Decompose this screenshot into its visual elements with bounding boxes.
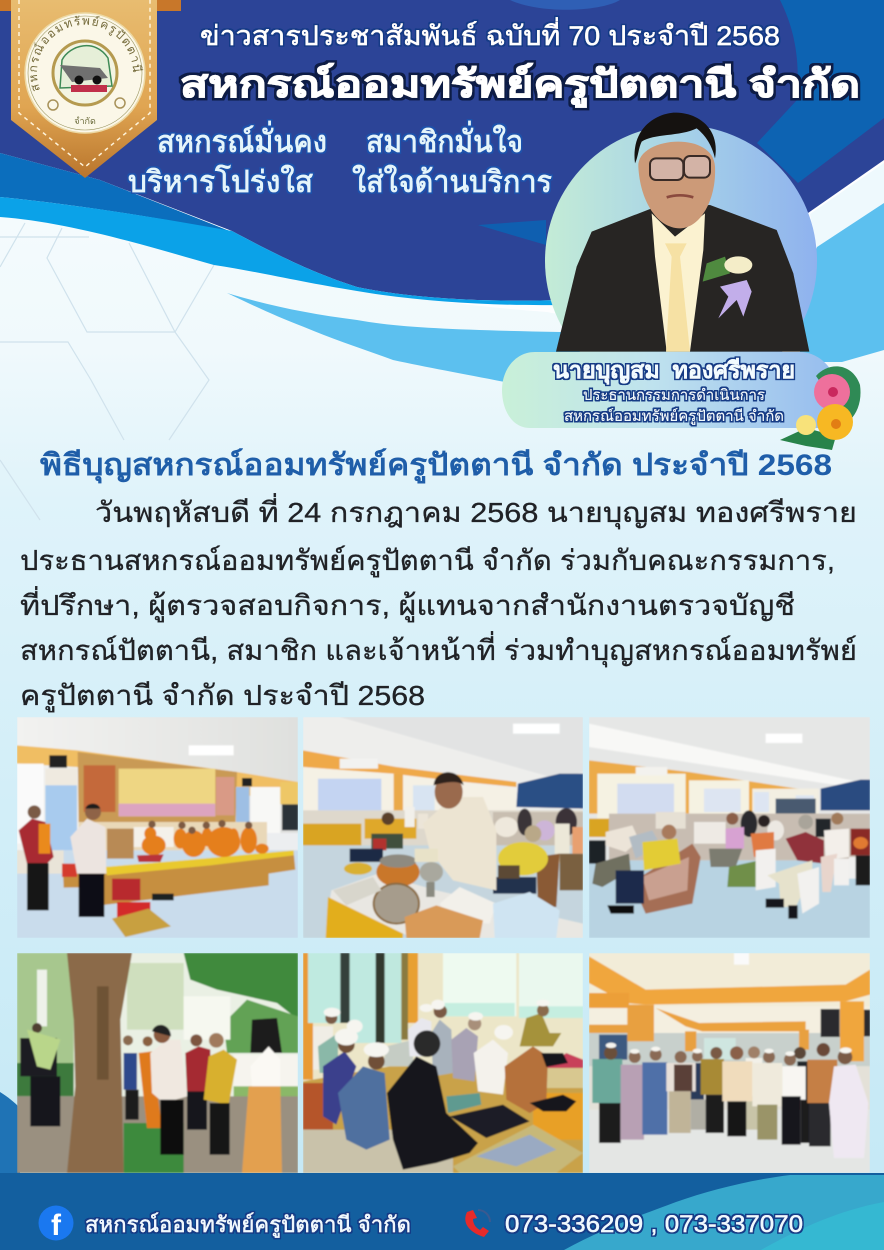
- event body text: ครูปัตตานี จำกัด ประจำปี 2568: [20, 680, 425, 713]
- corsage: [703, 256, 752, 318]
- photo: group portrait: [589, 953, 870, 1173]
- photo: planting by tree: [17, 953, 298, 1173]
- portrait: [545, 113, 817, 397]
- issue line: ข่าวสารประชาสัมพันธ์ ฉบับที่ 70 ประจำปี 2568: [200, 17, 780, 51]
- logo seal: จำกัด: [74, 116, 96, 126]
- tie: [665, 243, 690, 352]
- jacket: [556, 205, 809, 352]
- icon: tropical flowers: [780, 366, 861, 450]
- logo ribbon: [0, 0, 181, 178]
- photo: seated audience: [589, 717, 870, 938]
- footer band: [0, 1173, 884, 1250]
- logo seal: สหกรณ์ออมทรัพย์ครูปัตตานี: [30, 15, 144, 92]
- event body text: [20, 493, 857, 713]
- glasses: [650, 156, 710, 180]
- event body text: สหกรณ์ปัตตานี, สมาชิก และเจ้าหน้าที่ ร่วมทำบุญสหกรณ์ออมทรัพย์: [20, 631, 857, 668]
- event body text: ที่ปรึกษา, ผู้ตรวจสอบกิจการ, ผู้แทนจากสำนักงานตรวจบัญชี: [20, 586, 795, 623]
- event body text: ประธานสหกรณ์ออมทรัพย์ครูปัตตานี จำกัด ร่วมกับคณะกรรมการ,: [20, 545, 835, 578]
- slogans: สมาชิกมั่นใจ: [366, 121, 523, 159]
- name plate: [502, 352, 836, 428]
- phone numbers: 073-336209 , 073-337070: [505, 1211, 803, 1238]
- photo: prayer group: [303, 953, 583, 1173]
- name plate: สหกรณ์ออมทรัพย์ครูปัตตานี จำกัด: [564, 408, 784, 425]
- title: สหกรณ์ออมทรัพย์ครูปัตตานี จำกัด: [180, 63, 860, 108]
- photo: chairman at offering table: [303, 717, 583, 938]
- facebook page name: สหกรณ์ออมทรัพย์ครูปัตตานี จำกัด: [85, 1212, 411, 1238]
- icon: phone: [465, 1210, 490, 1237]
- shirt: [652, 213, 705, 352]
- icon: facebook: f: [51, 1209, 62, 1242]
- photo: monks on stage: [17, 717, 298, 938]
- slogans: สหกรณ์มั่นคง: [157, 121, 327, 159]
- name plate: นายบุญสม ทองศรีพราย: [553, 357, 795, 385]
- icon: facebook: [38, 1206, 74, 1242]
- head: [638, 142, 715, 228]
- name plate: ประธานกรรมการดำเนินการ: [583, 387, 765, 404]
- logo seal: [24, 12, 146, 134]
- event heading: พิธีบุญสหกรณ์ออมทรัพย์ครูปัตตานี จำกัด ประจำปี 2568: [40, 448, 832, 484]
- header waves: [0, 0, 884, 385]
- slogans: บริหารโปร่งใส: [128, 164, 313, 199]
- slogans: [128, 121, 552, 199]
- event body text: วันพฤหัสบดี ที่ 24 กรกฎาคม 2568 นายบุญสม ทองศรีพราย: [95, 493, 857, 530]
- slogans: ใส่ใจด้านบริการ: [352, 165, 552, 199]
